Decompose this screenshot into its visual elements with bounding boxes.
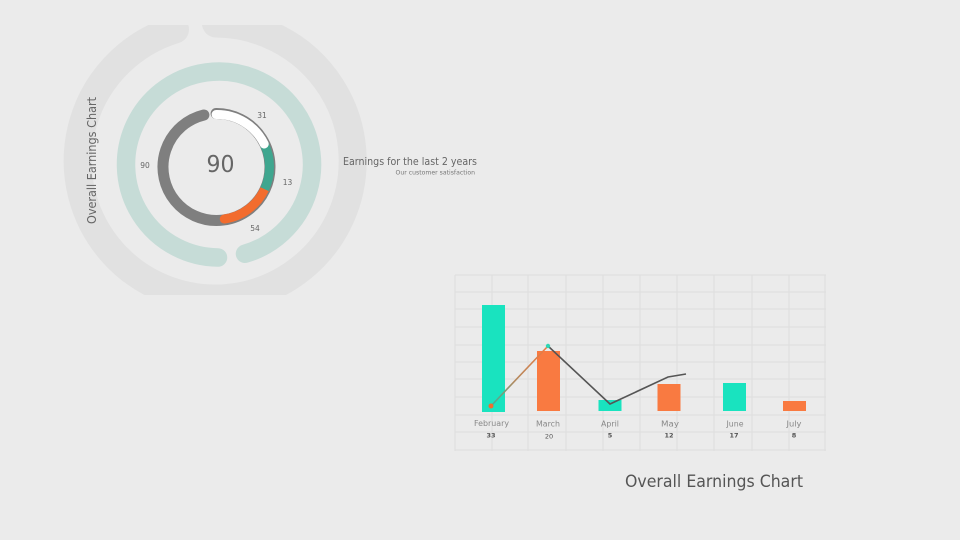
donut: grey track	[163, 113, 270, 220]
month values: 5	[608, 432, 613, 440]
donut chart	[163, 113, 270, 220]
earnings heading: Earnings for the last 2 years	[343, 155, 477, 168]
bar: March	[537, 351, 560, 411]
donut labels: 31	[257, 111, 267, 120]
month values	[486, 432, 797, 440]
month labels: March	[536, 420, 560, 428]
month values: 20	[545, 432, 553, 440]
bar: July	[783, 401, 806, 411]
rotated ring title: Overall Earnings Chart	[84, 97, 99, 224]
outer grey ring	[78, 24, 353, 298]
donut: white segment	[216, 114, 264, 144]
month values: 8	[792, 432, 797, 440]
month values: 17	[729, 432, 739, 440]
donut: orange segment	[224, 189, 265, 219]
month labels: May	[661, 420, 679, 428]
month labels: June	[726, 420, 744, 428]
bar: April	[598, 400, 622, 411]
donut labels: 90	[140, 161, 150, 170]
donut centre value: 90	[206, 152, 234, 178]
month values: 33	[486, 432, 496, 440]
donut labels: 13	[283, 178, 292, 187]
donut: teal segment	[264, 144, 270, 189]
month labels	[474, 419, 802, 428]
chart title: Overall Earnings Chart	[625, 472, 803, 491]
bar: May	[658, 384, 680, 411]
bar: June	[723, 383, 746, 411]
month labels: July	[785, 420, 802, 428]
month labels: February	[474, 419, 509, 428]
donut labels	[140, 111, 292, 233]
line series	[488, 344, 686, 408]
bar: February	[482, 305, 505, 412]
donut labels: 54	[250, 224, 260, 233]
bar and line chart	[455, 275, 826, 451]
month labels: April	[601, 420, 619, 428]
month values: 12	[664, 432, 674, 440]
teal ring	[126, 72, 312, 257]
earnings subheading: Our customer satisfaction	[396, 168, 475, 176]
